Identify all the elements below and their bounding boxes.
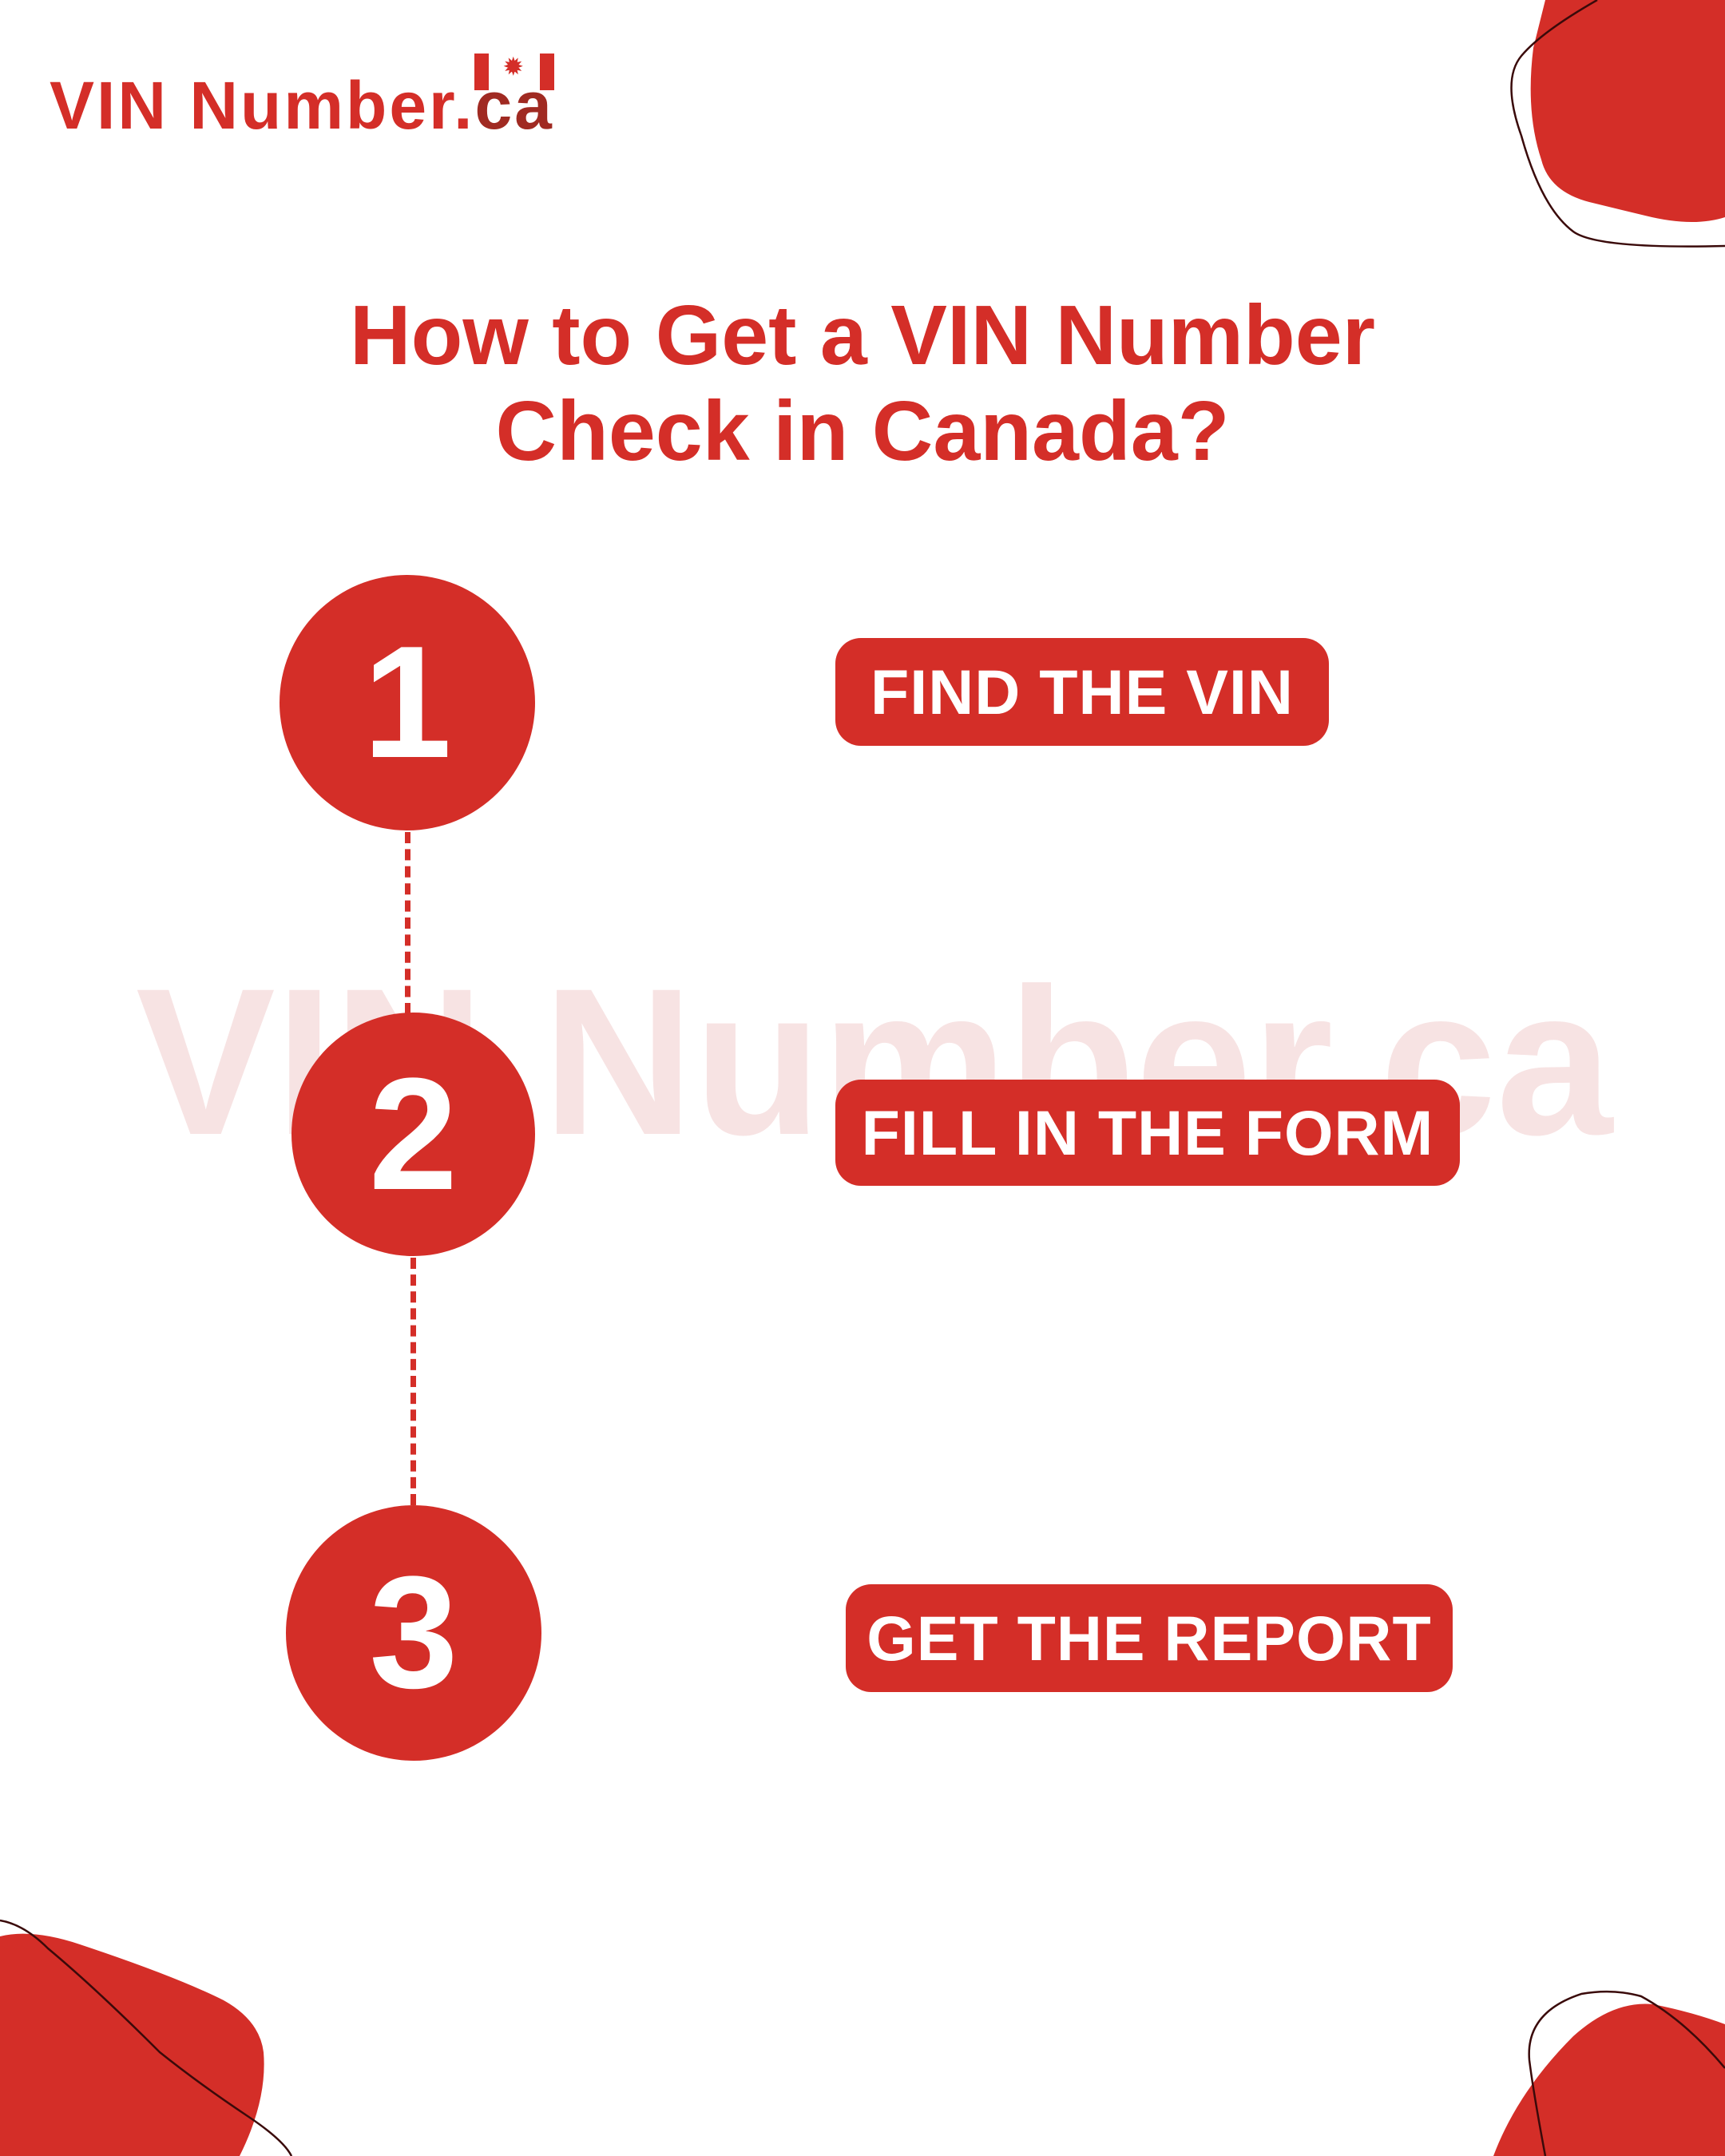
title: Check in Canada? (496, 384, 1229, 478)
logo: ✹ (504, 54, 525, 79)
step 2 label: FILL IN THE FORM (862, 1097, 1434, 1167)
step 3 circle (286, 1505, 541, 1761)
logo: ca (474, 68, 554, 143)
dashed connector 2-3 (410, 1258, 416, 1505)
title: How to Get a VIN Number (350, 288, 1375, 382)
step 3 circle: 3 (369, 1544, 458, 1722)
step 2 label (835, 1080, 1460, 1186)
step 1 label: FIND THE VIN (870, 656, 1294, 727)
title (350, 288, 1375, 478)
step 1 circle (280, 575, 535, 830)
step 1 label (835, 638, 1329, 746)
dashed connector 1-2 (405, 832, 410, 1014)
step 2 circle (291, 1013, 535, 1256)
step 3 label (846, 1584, 1453, 1692)
watermark: VIN Number.ca (136, 945, 1612, 1179)
step 1 circle: 1 (363, 613, 452, 791)
logo: VIN Number. (50, 68, 474, 143)
step 2 circle: 2 (369, 1044, 458, 1223)
step 3 label: GET THE REPORT (866, 1602, 1432, 1674)
